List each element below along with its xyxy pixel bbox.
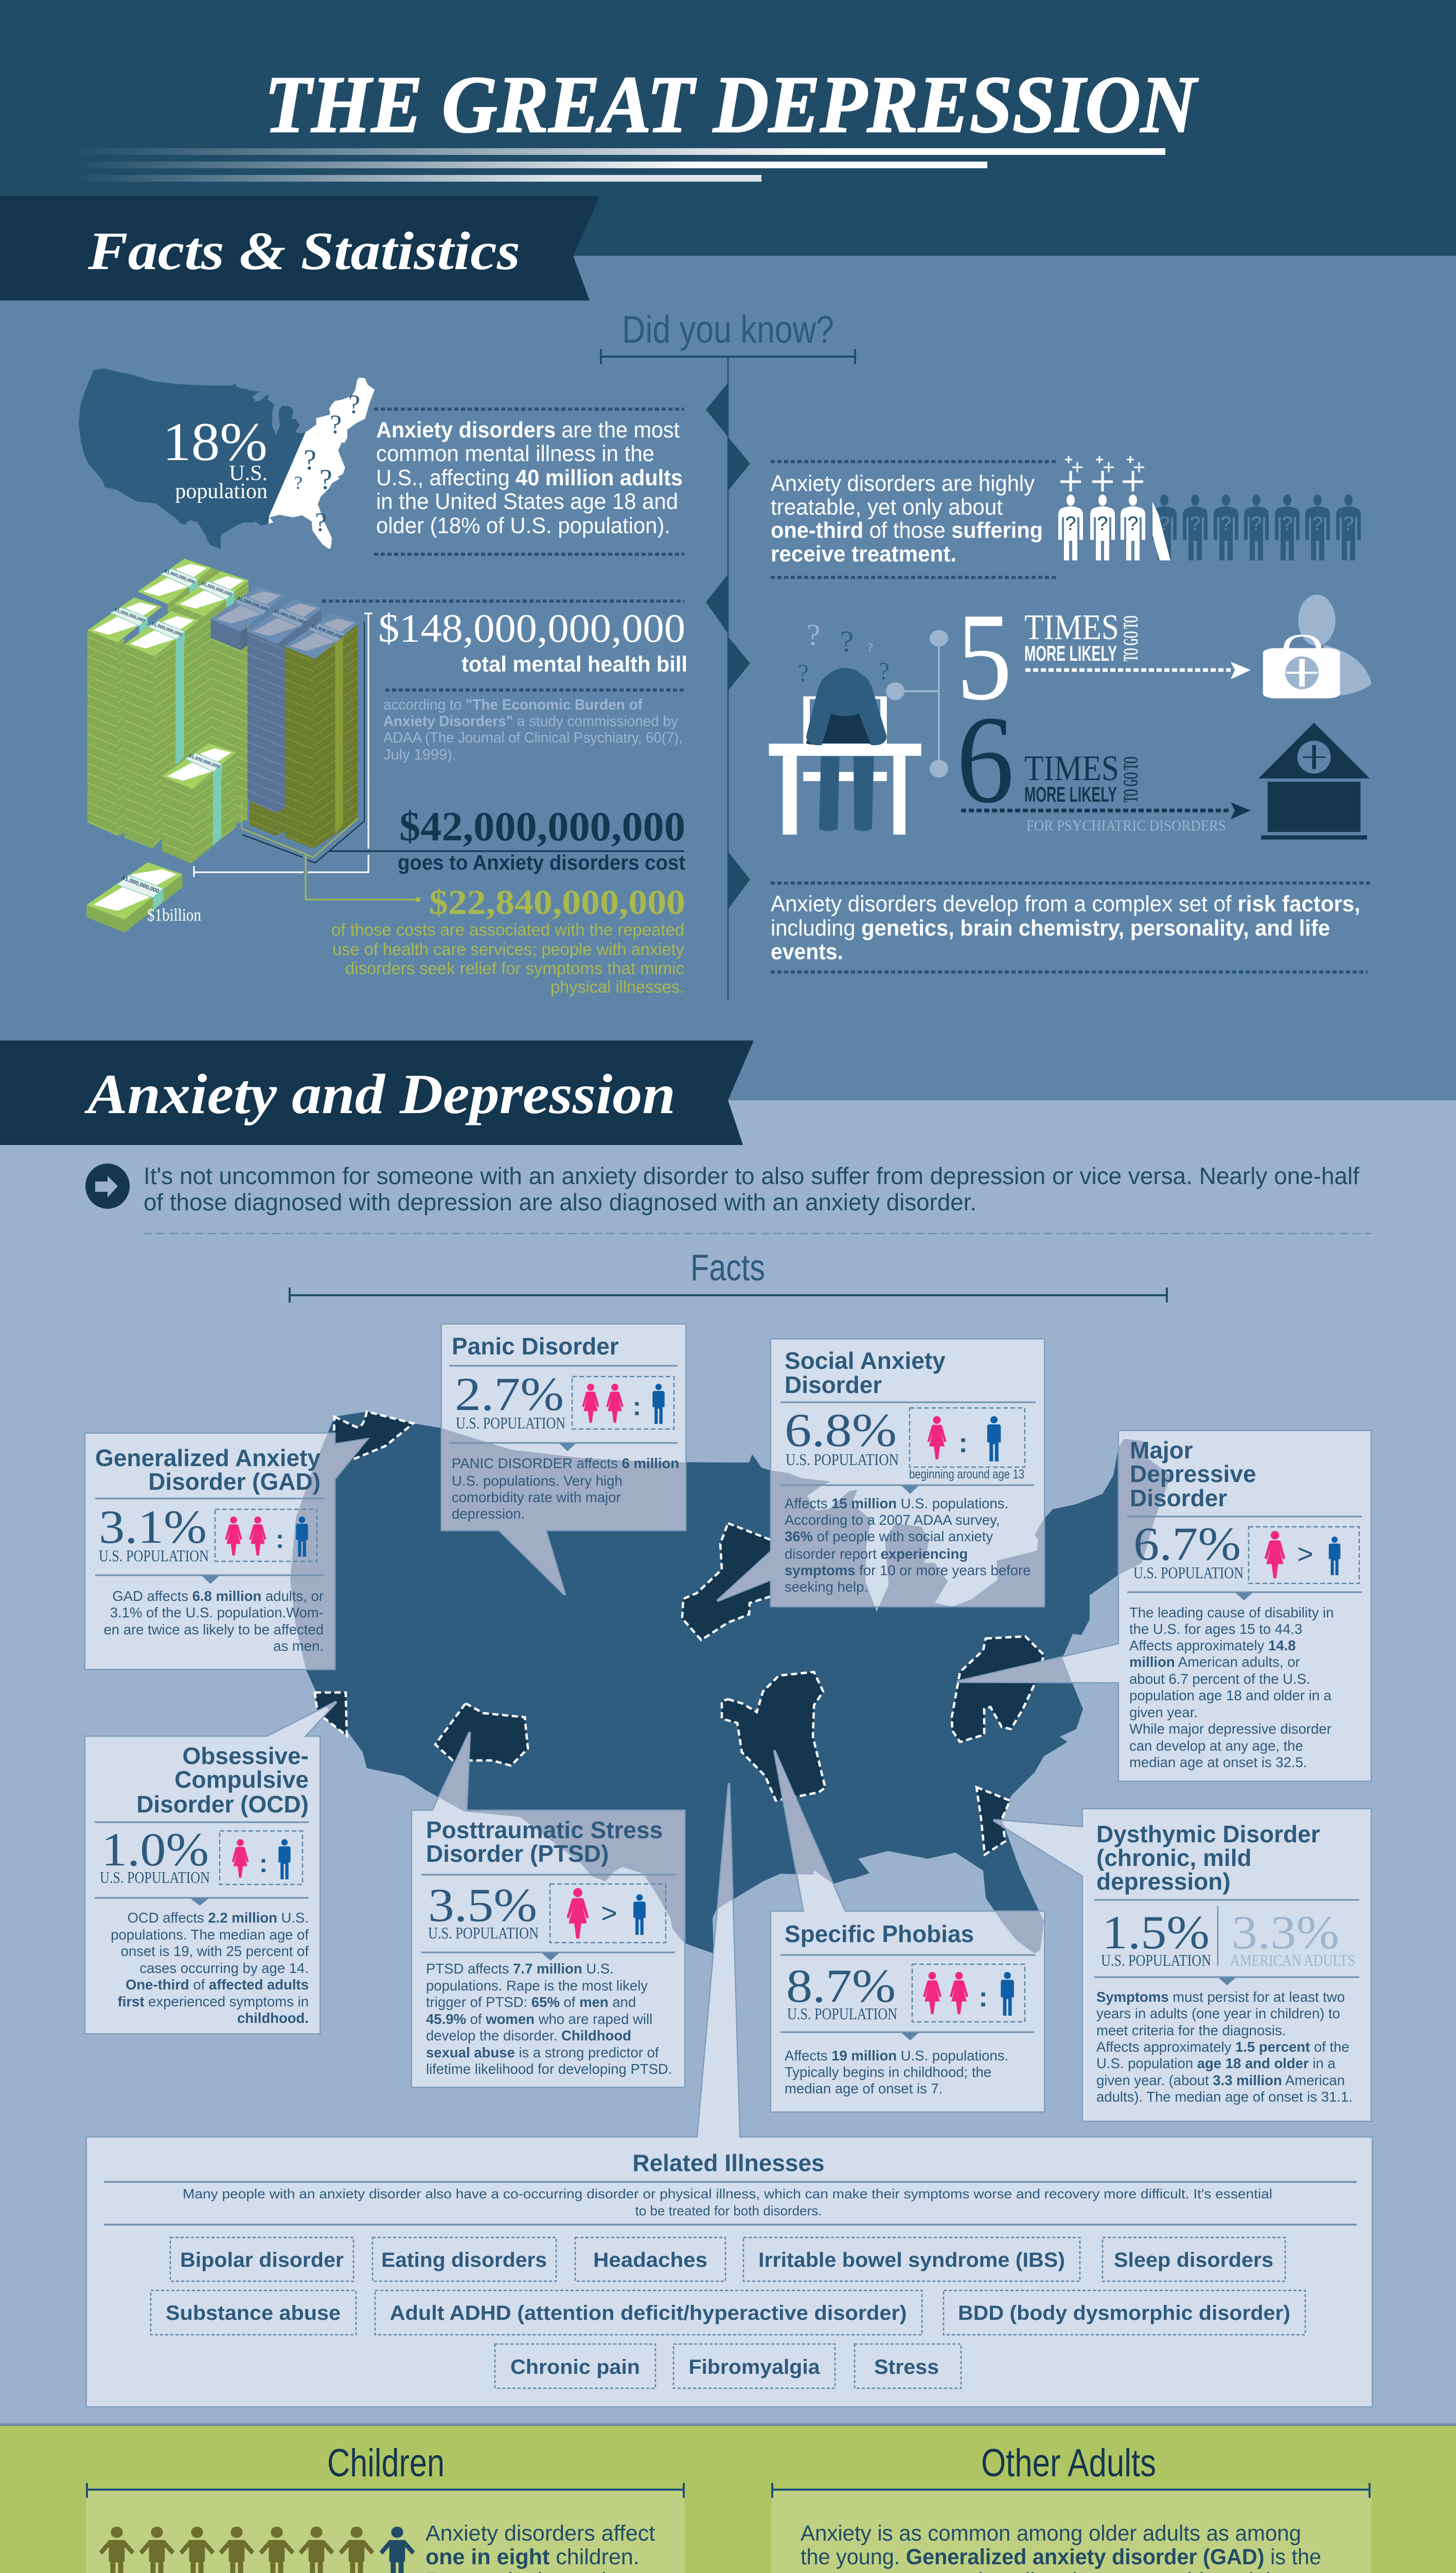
text block: anxiety disorders most common: common mental illness in the: [376, 442, 654, 466]
card: major depressive disorder: the U.S. for ages 15 to 44.3: [1129, 1621, 1302, 1637]
card: specific phobias: 8.7%: [786, 1960, 896, 2012]
panel: related illnesses: Eating disorders: [381, 2249, 547, 2271]
text: anxiety in older adults: [801, 2521, 1336, 2573]
text block: highly treatable: receive treatment.: [771, 542, 956, 567]
card: generalized anxiety disorder: 3.1%: [99, 1501, 207, 1553]
card: specific phobias: :: [979, 1982, 988, 2013]
connector between person and statistics: [886, 630, 948, 778]
panel: related illnesses: Substance abuse: [166, 2302, 341, 2324]
illustration: stacks of money: $1,000,000,000: [164, 568, 196, 585]
source note: according to "The Economic Burden of: [383, 697, 643, 713]
card: posttraumatic stress disorder: [421, 1817, 676, 2077]
section heading ribbon: Facts & Statistics: [0, 196, 600, 301]
stat: $22.84 billion repeated care: disorders seek relief for symptoms that mimic: [345, 959, 684, 978]
panel: related illnesses: Bipolar disorder: [180, 2249, 344, 2271]
US map with 18% east portion highlighted: [79, 368, 375, 549]
card: dysthymic disorder: years in adults (one year in children) to: [1096, 2005, 1340, 2021]
stat: 5 times more likely to go to doctor: [956, 587, 1251, 726]
card: posttraumatic stress disorder: sexual abuse is a strong predictor of: [426, 2045, 659, 2060]
card: specific phobias: median age of onset is 7.: [785, 2081, 943, 2096]
card: obsessive-compulsive disorder: cases occurring by age 14.: [139, 1960, 309, 1976]
card: dysthymic disorder: Dysthymic Disorder: [1096, 1821, 1320, 1847]
text block: risk factors: events.: [771, 940, 843, 964]
card: dysthymic disorder: 3.3%: [1232, 1906, 1339, 1959]
text block: highly treatable: [771, 462, 1056, 577]
panel: related illnesses: Irritable bowel syndrome (IBS): [758, 2249, 1065, 2271]
card: generalized anxiety disorder: en are twice as likely to be affected: [103, 1622, 324, 1637]
card: generalized anxiety disorder: 3.1% of the U.S. population.Wom-: [110, 1605, 324, 1620]
pictogram: one third of people treated: ?: [1065, 513, 1076, 535]
card: dysthymic disorder: Symptoms must persist for at least two: [1096, 1989, 1345, 2005]
card: posttraumatic stress disorder: develop the disorder. Childhood: [426, 2028, 631, 2043]
stat: 5 times more likely to go to doctor: MORE LIKELY: [1024, 641, 1117, 665]
card: obsessive-compulsive disorder: :: [259, 1849, 268, 1878]
facts bracket: [290, 1288, 1167, 1302]
text block: risk factors: including genetics, brain chemistry, personality, and life: [771, 916, 1330, 941]
card: obsessive-compulsive disorder: onset is 19, with 25 percent of: [121, 1943, 309, 1959]
text: one in eight children: Anxiety disorders affect: [425, 2521, 655, 2546]
card: obsessive-compulsive disorder: [95, 1742, 309, 2026]
heading: Facts: Facts: [690, 1247, 765, 1289]
panel: children: [86, 2441, 685, 2573]
text block: highly treatable: one-third of those suffering: [771, 518, 1043, 543]
header background: [0, 0, 1456, 256]
stat: $148 billion total bill: $148,000,000,000: [378, 606, 685, 650]
pictogram: one third of people treated: ?: [1189, 513, 1201, 535]
panel: related illnesses: Many people with an anxiety disorder also have a co-occurring disorder or physical illness, which can make their symptoms worse and recovery more difficult. It's essential: [183, 2186, 1272, 2201]
US map with 18% east portion highlighted: ?: [315, 508, 327, 537]
card: generalized anxiety disorder: GAD affects 6.8 million adults, or: [112, 1588, 324, 1604]
stat: $148 billion total bill: total mental health bill: [461, 652, 687, 677]
card: major depressive disorder: Disorder: [1130, 1485, 1227, 1511]
illustration: stacks of money: $1,000,000,000: [311, 623, 343, 640]
US map with 18% east portion highlighted: ?: [348, 390, 360, 419]
card: posttraumatic stress disorder: lifetime likelihood for developing PTSD.: [426, 2061, 672, 2077]
card: posttraumatic stress disorder: populations. Rape is the most likely: [426, 1978, 648, 1994]
pictogram: one third of people treated: [1058, 456, 1361, 560]
card: dysthymic disorder: U.S. population age 18 and older in a: [1096, 2055, 1336, 2071]
panel: related illnesses: [104, 2149, 1357, 2388]
card: specific phobias: Affects 19 million U.S. populations.: [785, 2048, 1008, 2064]
text: anxiety in older adults: Anxiety is as common among older adults as among: [801, 2521, 1301, 2546]
pictogram: one third of people treated: ?: [1097, 513, 1108, 535]
stat: $22.84 billion repeated care: of those costs are associated with the repeated: [331, 920, 684, 939]
US map with 18% east portion highlighted: ?: [294, 472, 303, 493]
card: panic disorder: Panic Disorder: [452, 1333, 619, 1360]
card: major depressive disorder: Affects approximately 14.8: [1129, 1637, 1296, 1653]
stat: 6 times more likely for psychiatric disorders: TO GO TO: [1119, 756, 1142, 802]
card: major depressive disorder: given year.: [1129, 1704, 1198, 1720]
card: posttraumatic stress disorder: U.S. POPULATION: [428, 1924, 539, 1942]
panel: related illnesses: Headaches: [593, 2249, 707, 2271]
source note: July 1999).: [383, 747, 456, 763]
pictogram: one third of people treated: ?: [1159, 513, 1170, 535]
panel: other adults: [771, 2441, 1371, 2573]
card: social anxiety disorder: [780, 1347, 1036, 1595]
US map with 18% east portion highlighted: ?: [330, 410, 342, 439]
pictogram: one third of people treated: ?: [1343, 513, 1354, 535]
card: dysthymic disorder: adults). The median age of onset is 31.1.: [1096, 2089, 1353, 2105]
source note: ADAA (The Journal of Clinical Psychiatry, 60(7),: [383, 730, 683, 746]
title: THE GREAT DEPRESSION: [264, 60, 1199, 150]
text: one in eight children: [425, 2521, 674, 2573]
card: major depressive disorder: million American adults, or: [1129, 1654, 1300, 1670]
title speed stripes: [74, 148, 1165, 182]
pictogram: one third of people treated: ?: [1127, 513, 1139, 535]
section heading ribbon: Anxiety and Depression: [0, 1041, 754, 1145]
card: social anxiety disorder: According to a 2007 ADAA survey,: [785, 1512, 1000, 1528]
text: anxiety in older adults: the young. Generalized anxiety disorder (GAD) is the: [801, 2545, 1321, 2569]
card: dysthymic disorder: 1.5%: [1102, 1906, 1210, 1959]
card: major depressive disorder: Major: [1130, 1437, 1193, 1464]
card: generalized anxiety disorder: Generalized Anxiety: [95, 1444, 321, 1471]
bracket and central timeline with arrows: [601, 349, 855, 999]
illustration: stacks of money: $1,000,000,000: [151, 621, 183, 637]
card: major depressive disorder: 6.7%: [1133, 1518, 1241, 1570]
card: generalized anxiety disorder: Disorder (GAD): [148, 1468, 321, 1495]
pictogram: one third of people treated: ?: [1312, 513, 1323, 535]
large US map: [290, 1412, 1171, 1953]
card: obsessive-compulsive disorder: OCD affects 2.2 million U.S.: [127, 1910, 309, 1926]
stat: 6 times more likely for psychiatric disorders: [956, 690, 1251, 834]
US map with 18% east portion highlighted: population: [175, 480, 268, 503]
illustration: person with head in hands at desk: ?: [798, 660, 809, 686]
card: panic disorder: U.S. POPULATION: [456, 1414, 565, 1432]
card: major depressive disorder: U.S. POPULATION: [1133, 1563, 1244, 1582]
icon: single one billion stack: [86, 862, 201, 932]
text block: anxiety disorders most common: U.S., affecting 40 million adults: [376, 466, 683, 490]
card: major depressive disorder: can develop at any age, the: [1129, 1738, 1303, 1754]
stat: 5 times more likely to go to doctor: TIMES: [1024, 608, 1119, 647]
panel: related illnesses: BDD (body dysmorphic disorder): [958, 2302, 1290, 2324]
card: generalized anxiety disorder: as men.: [273, 1638, 324, 1654]
card: obsessive-compulsive disorder: One-third of affected adults: [126, 1977, 309, 1993]
text block: highly treatable: treatable, yet only about: [771, 495, 1003, 520]
panel: related illnesses: Chronic pain: [510, 2356, 640, 2378]
section heading ribbon: Facts & Statistics: Facts & Statistics: [87, 221, 520, 281]
card: dysthymic disorder: meet criteria for the diagnosis.: [1096, 2022, 1286, 2038]
card: panic disorder: comorbidity rate with major: [452, 1489, 621, 1505]
card: panic disorder: depression.: [452, 1506, 525, 1522]
US map with 18% east portion highlighted: ?: [304, 444, 316, 476]
card: social anxiety disorder: 6.8%: [785, 1404, 897, 1456]
card: specific phobias: Specific Phobias: [785, 1920, 974, 1947]
panel: related illnesses: Sleep disorders: [1114, 2249, 1273, 2271]
card: posttraumatic stress disorder: Disorder (PTSD): [426, 1840, 609, 1867]
illustration: stacks of money: $1,000,000,000: [114, 607, 146, 623]
card: generalized anxiety disorder: U.S. POPULATION: [99, 1546, 209, 1565]
card: dysthymic disorder: Affects approximately 1.5 percent of the: [1096, 2039, 1350, 2055]
icon: single one billion stack: $1billion: [147, 906, 201, 925]
card: posttraumatic stress disorder: trigger of PTSD: 65% of men and: [426, 1994, 636, 2010]
card: major depressive disorder: [1127, 1437, 1362, 1770]
illustration: stacks of money: $1,000,000,000: [237, 595, 269, 612]
text block: anxiety disorders most common: older (18% of U.S. population).: [376, 514, 670, 538]
text block: anxiety disorders most common: in the United States age 18 and: [376, 489, 678, 514]
card: dysthymic disorder: AMERICAN ADULTS: [1230, 1951, 1355, 1969]
heading: Did you know?: Did you know?: [622, 308, 834, 351]
intro paragraph: It's not uncommon for someone with an anxiety disorder to also suffer from depression or vice versa. Nearly one-half: [144, 1162, 1359, 1189]
stat: 6 times more likely for psychiatric disorders: FOR PSYCHIATRIC DISORDERS: [1026, 817, 1226, 834]
text block: anxiety disorders most common: [374, 409, 684, 554]
chart bracket lines: [194, 613, 684, 900]
panel: related illnesses: Fibromyalgia: [688, 2356, 820, 2378]
intro paragraph: of those diagnosed with depression are also diagnosed with an anxiety disorder.: [144, 1189, 976, 1215]
section heading ribbon: Anxiety and Depression: Anxiety and Depression: [84, 1063, 676, 1125]
card: panic disorder: [449, 1333, 679, 1522]
arrow bullet icon: [85, 1164, 130, 1209]
card: panic disorder: :: [633, 1392, 641, 1421]
card: dysthymic disorder: [1094, 1821, 1359, 2105]
heading: Children: Children: [327, 2441, 445, 2485]
card: generalized anxiety disorder: :: [276, 1525, 284, 1554]
card: major depressive disorder: Depressive: [1130, 1460, 1256, 1487]
card: major depressive disorder: about 6.7 percent of the U.S.: [1129, 1671, 1310, 1687]
stat: $42 billion anxiety cost: $42,000,000,000: [399, 804, 685, 850]
text: one in eight children: one in eight children.: [425, 2545, 640, 2569]
stat: $42 billion anxiety cost: goes to Anxiety disorders cost: [398, 851, 685, 874]
stat: $22.84 billion repeated care: physical illnesses.: [551, 977, 684, 996]
heading: Other Adults: Other Adults: [981, 2441, 1156, 2485]
pictogram: one third of people treated: ?: [1282, 513, 1293, 535]
card: obsessive-compulsive disorder: first experienced symptoms in: [118, 1994, 309, 2010]
card: dysthymic disorder: U.S. POPULATION: [1101, 1951, 1211, 1969]
card: specific phobias: [780, 1920, 1036, 2096]
card: social anxiety disorder: seeking help.: [785, 1579, 868, 1595]
card: posttraumatic stress disorder: Posttraumatic Stress: [426, 1817, 663, 1843]
text block: anxiety disorders most common: Anxiety disorders are the most: [376, 418, 680, 443]
source note: [383, 690, 684, 763]
map seen through cards: [290, 1412, 1171, 1953]
card: specific phobias: Typically begins in childhood; the: [785, 2064, 991, 2080]
anxiety and depression section background: [0, 1100, 1456, 2426]
card: social anxiety disorder: U.S. POPULATION: [786, 1450, 899, 1469]
illustration: person with head in hands at desk: ?: [867, 641, 873, 654]
stat: $42 billion anxiety cost: [398, 804, 685, 874]
card: obsessive-compulsive disorder: childhood.: [237, 2010, 309, 2026]
US map with 18% east portion highlighted: 18%: [163, 412, 268, 472]
stat: 6 times more likely for psychiatric disorders: MORE LIKELY: [1024, 782, 1117, 806]
stat: $22.84 billion repeated care: use of health care services; people with anxiety: [332, 940, 684, 959]
text block: highly treatable: Anxiety disorders are highly: [771, 471, 1035, 496]
illustration: person with head in hands at desk: ?: [879, 658, 890, 685]
card: posttraumatic stress disorder: 3.5%: [428, 1879, 537, 1931]
card: posttraumatic stress disorder: 45.9% of women who are raped will: [426, 2011, 652, 2027]
illustration: stacks of money: $1,000,000,000: [201, 580, 233, 597]
panel: related illnesses: Stress: [874, 2356, 939, 2378]
card: obsessive-compulsive disorder: Compulsive: [174, 1766, 309, 1793]
card: social anxiety disorder: Affects 15 million U.S. populations.: [785, 1495, 1008, 1511]
icon: hospital house: [1258, 722, 1370, 839]
card: obsessive-compulsive disorder: 1.0%: [101, 1823, 209, 1876]
US map with 18% east portion highlighted: U.S.: [229, 462, 268, 485]
card: social anxiety disorder: symptoms for 10 or more years before: [785, 1562, 1031, 1578]
panel: related illnesses: to be treated for both disorders.: [635, 2203, 822, 2218]
card: posttraumatic stress disorder: PTSD affects 7.7 million U.S.: [426, 1961, 614, 1977]
US map with 18% east portion highlighted: ?: [319, 464, 332, 496]
card: generalized anxiety disorder: [95, 1444, 324, 1654]
illustration: stacks of money: $1,000,000,000: [274, 608, 306, 625]
panel: related illnesses: Adult ADHD (attention deficit/hyperactive disorder): [390, 2302, 907, 2324]
pictogram: one in eight children: [96, 2527, 415, 2573]
card: social anxiety disorder: 36% of people with social anxiety: [785, 1528, 993, 1544]
text block: risk factors: [771, 883, 1371, 972]
card: social anxiety disorder: :: [958, 1428, 968, 1458]
illustration: person with head in hands at desk: [769, 618, 921, 835]
card: major depressive disorder: population age 18 and older in a: [1129, 1687, 1332, 1703]
stat: $22.84 billion repeated care: [331, 883, 685, 996]
card: panic disorder: U.S. populations. Very high: [452, 1473, 623, 1489]
text block: risk factors: Anxiety disorders develop from a complex set of risk factors,: [771, 892, 1360, 917]
stat: 5 times more likely to go to doctor: TO GO TO: [1119, 615, 1142, 661]
pictogram: one third of people treated: ?: [1251, 513, 1262, 535]
illustration: person with head in hands at desk: ?: [807, 618, 820, 651]
card: obsessive-compulsive disorder: Obsessive-: [183, 1742, 309, 1769]
card: specific phobias: U.S. POPULATION: [787, 2004, 897, 2023]
illustration: stacks of money: [87, 559, 364, 863]
card: dysthymic disorder: depression): [1096, 1868, 1231, 1895]
card backgrounds and callout tails: [85, 1325, 1372, 2406]
card: major depressive disorder: The leading cause of disability in: [1129, 1605, 1334, 1620]
card: obsessive-compulsive disorder: U.S. POPULATION: [100, 1868, 210, 1887]
card: obsessive-compulsive disorder: Disorder (OCD): [136, 1791, 309, 1818]
card: major depressive disorder: >: [1297, 1539, 1313, 1570]
source note: Anxiety Disorders" a study commissioned by: [383, 713, 678, 730]
card: social anxiety disorder: Disorder: [785, 1371, 882, 1398]
card: dysthymic disorder: (chronic, mild: [1096, 1844, 1252, 1871]
children and adults section background: [0, 2426, 1456, 2573]
card: major depressive disorder: While major depressive disorder: [1129, 1721, 1331, 1737]
card: dysthymic disorder: given year. (about 3.3 million American: [1096, 2072, 1345, 2088]
card: major depressive disorder: median age at onset is 32.5.: [1129, 1754, 1307, 1770]
card: panic disorder: 2.7%: [455, 1368, 564, 1420]
stat: 5 times more likely to go to doctor: 5: [956, 587, 1012, 726]
card: panic disorder: PANIC DISORDER affects 6 million: [452, 1455, 679, 1471]
panel: related illnesses: Related Illnesses: [632, 2149, 825, 2176]
facts and statistics section background: [0, 256, 1456, 1100]
card: posttraumatic stress disorder: >: [601, 1898, 617, 1929]
pictogram: one third of people treated: ?: [1220, 513, 1232, 535]
stat: $22.84 billion repeated care: $22,840,000,000: [429, 883, 685, 922]
stat: $148 billion total bill: [322, 601, 687, 677]
illustration: stacks of money: $1,000,000,000: [188, 753, 220, 769]
stat: 6 times more likely for psychiatric disorders: 6: [956, 690, 1014, 829]
card: obsessive-compulsive disorder: populations. The median age of: [111, 1927, 309, 1943]
stat: 6 times more likely for psychiatric disorders: TIMES: [1024, 749, 1119, 788]
intro paragraph: [144, 1162, 1371, 1233]
card: social anxiety disorder: disorder report experiencing: [785, 1546, 968, 1562]
icon: single one billion stack: $1,000,000,000: [121, 875, 160, 895]
map highlighted regions: [315, 1412, 1044, 1855]
card: social anxiety disorder: Social Anxiety: [785, 1347, 946, 1374]
card: social anxiety disorder: beginning around age 13: [909, 1467, 1024, 1482]
icon: doctor with medical bag: [1263, 595, 1372, 698]
illustration: person with head in hands at desk: ?: [840, 624, 854, 658]
